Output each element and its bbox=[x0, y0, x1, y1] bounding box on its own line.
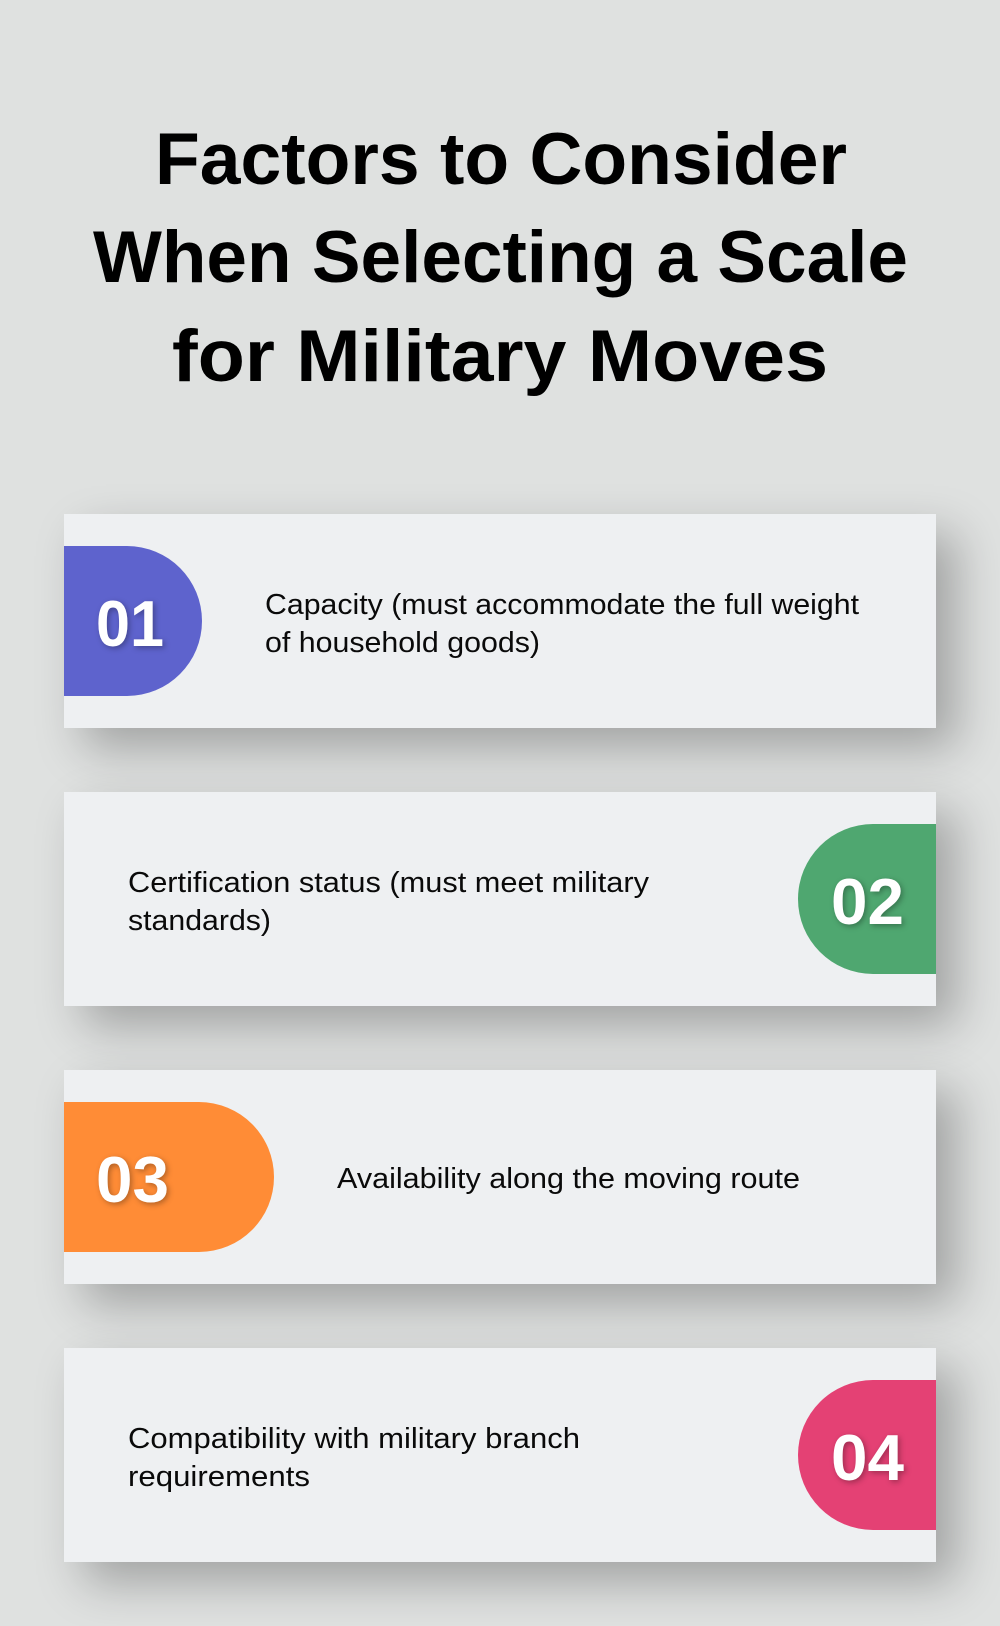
number and text 02 bbox=[128, 865, 906, 938]
number and text 02: 02 bbox=[831, 865, 904, 938]
number and text 02: Certification status (must meet military bbox=[128, 867, 650, 899]
number and text 04: Compatibility with military branch bbox=[128, 1423, 580, 1455]
title bbox=[93, 119, 908, 397]
number and text 03: 03 bbox=[96, 1143, 169, 1216]
panel: factor 02 certification bbox=[64, 792, 936, 1006]
badge 03 bbox=[64, 1102, 274, 1252]
number and text 04 bbox=[128, 1421, 908, 1494]
number and text 04: 04 bbox=[831, 1421, 904, 1494]
title: When Selecting a Scale bbox=[93, 217, 908, 298]
panel: factor 01 capacity bbox=[64, 514, 936, 728]
number and text 01: of household goods) bbox=[265, 627, 540, 659]
number and text 01 bbox=[96, 587, 859, 660]
title: Factors to Consider bbox=[155, 119, 847, 200]
panel: factor 03 availability bbox=[64, 1070, 936, 1284]
badge 04 bbox=[798, 1380, 936, 1530]
number and text 01: 01 bbox=[96, 587, 164, 660]
number and text 02: standards) bbox=[128, 905, 271, 937]
title: for Military Moves bbox=[172, 316, 828, 397]
number and text 03 bbox=[96, 1143, 800, 1216]
number and text 01: Capacity (must accommodate the full weight bbox=[265, 589, 859, 621]
badge 01 bbox=[64, 546, 202, 696]
number and text 03: Availability along the moving route bbox=[337, 1163, 800, 1195]
number and text 04: requirements bbox=[128, 1461, 310, 1493]
badge 02 bbox=[798, 824, 936, 974]
panel: factor 04 compatibility bbox=[64, 1348, 936, 1562]
